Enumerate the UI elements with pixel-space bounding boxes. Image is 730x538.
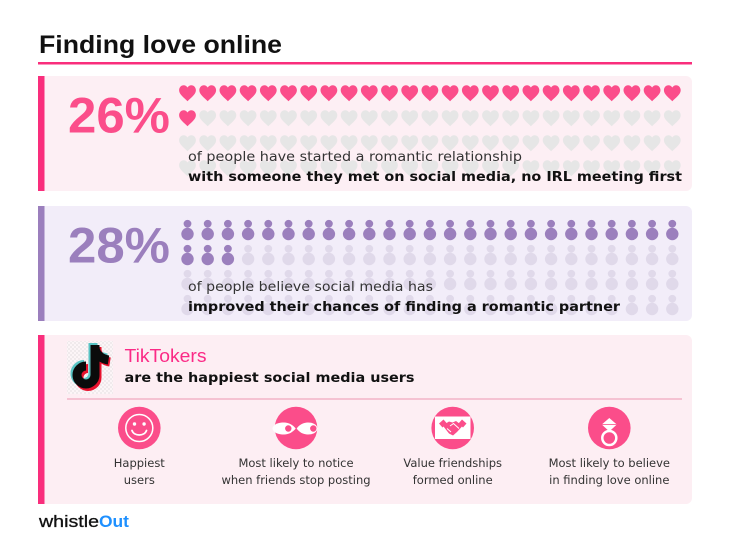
label bbox=[549, 456, 670, 487]
heart pictogram bbox=[179, 85, 681, 176]
description: 26 percent bbox=[188, 150, 682, 185]
logo: whistleOut: Out bbox=[99, 512, 129, 531]
label: users bbox=[124, 473, 155, 487]
label: when friends stop posting bbox=[221, 473, 371, 487]
icon: TikTok logo bbox=[67, 341, 113, 394]
description: 28 percent bbox=[188, 280, 621, 315]
item: notice friends bbox=[221, 407, 371, 487]
icon: diamond ring bbox=[588, 407, 631, 449]
panel: TikTokers bbox=[38, 335, 692, 504]
description: 28 percent: of people believe social media has bbox=[188, 280, 433, 295]
statistic: 28%: 28% bbox=[68, 218, 170, 274]
subheading: are the happiest social media users bbox=[124, 371, 415, 386]
label: Most likely to believe bbox=[549, 456, 670, 470]
logo: whistleOut: whistle bbox=[38, 512, 99, 531]
label: formed online bbox=[413, 473, 493, 487]
description: 26 percent: with someone they met on social media, no IRL meeting first bbox=[188, 170, 682, 185]
heading: TikTokers: TikTokers bbox=[124, 346, 206, 366]
label bbox=[114, 456, 165, 487]
label: Most likely to notice bbox=[238, 456, 354, 470]
icon: handshake bbox=[431, 407, 474, 449]
label: in finding love online bbox=[549, 473, 669, 487]
title underline bbox=[38, 62, 692, 64]
item: happiest users bbox=[114, 407, 165, 487]
statistic: 26%: 26% bbox=[68, 88, 170, 144]
label: Happiest bbox=[114, 456, 165, 470]
item: love online bbox=[549, 407, 670, 487]
panel: 26 percent bbox=[38, 76, 692, 191]
icon: eyes bbox=[272, 407, 318, 449]
label: Value friendships bbox=[403, 456, 502, 470]
divider bbox=[67, 398, 682, 400]
description: 26 percent: of people have started a romantic relationship bbox=[188, 150, 522, 165]
label bbox=[221, 456, 371, 487]
item: friendships bbox=[403, 407, 502, 487]
icon: smiley face bbox=[118, 407, 161, 449]
logo: whistleOut bbox=[38, 512, 129, 531]
description: 28 percent: improved their chances of finding a romantic partner bbox=[188, 300, 621, 315]
panel: 28 percent bbox=[38, 206, 692, 321]
people pictogram bbox=[181, 220, 679, 315]
title: Finding love online bbox=[39, 31, 282, 59]
label bbox=[403, 456, 502, 487]
